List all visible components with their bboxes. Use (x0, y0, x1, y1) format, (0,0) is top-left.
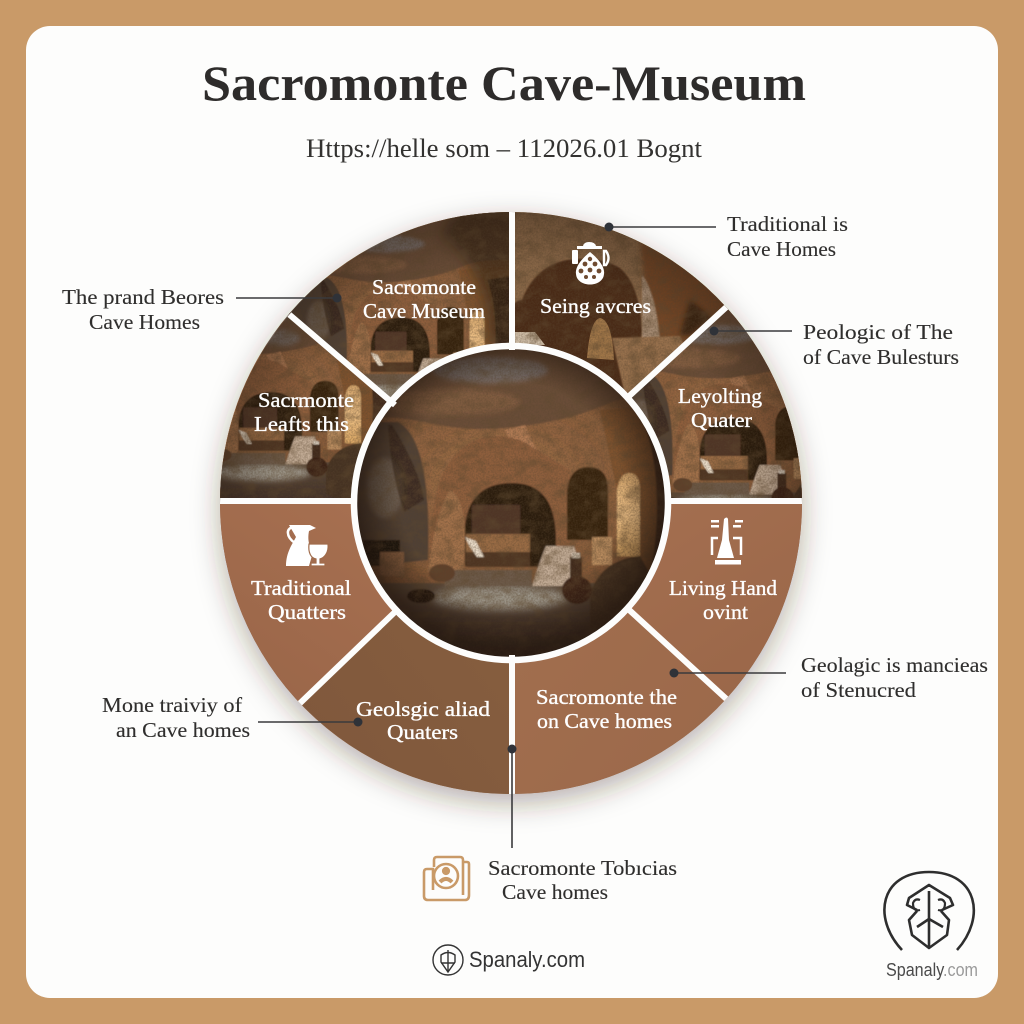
wedge: Leyolting Quater photo (632, 307, 802, 500)
logo wordmark: Spanaly.com (886, 960, 978, 980)
wheel shadow base (220, 212, 802, 794)
callout: Peologic of The of Cave Bulesturs (710, 320, 959, 369)
wedge: Sacrmonte Leafts this photo (220, 314, 386, 499)
callout: The prand Beores Cave Homes (62, 285, 342, 334)
callout: Traditional is Cave Homes (604, 212, 848, 261)
wedge: Sacromonte Cave Museum photo (289, 212, 509, 397)
circular wheel diagram (202, 204, 820, 820)
callout: Traditional is Cave Homes: Traditional is (727, 212, 848, 236)
logo emblem (884, 872, 974, 950)
callout: Sacromonte Tobicias Cave homes: Sacromonte Tobıcias (488, 856, 677, 880)
icon: hat and cluster (572, 242, 608, 284)
segment label: Sacromonte the on Cave homes: Sacromonte the (536, 685, 677, 709)
segment label: Sacromonte Cave Museum: Cave Museum (363, 299, 485, 323)
wedge: Living Hand ovint (511, 503, 802, 699)
callout: Traditional is Cave Homes: Cave Homes (727, 237, 836, 261)
segment label: Traditional Quatters: Quatters (268, 600, 346, 624)
footer logo icon (433, 945, 463, 975)
wedge: Seing avcres photo (515, 212, 726, 393)
central cave photo (357, 349, 665, 656)
icon: photo frames (424, 857, 469, 900)
icon: bell and handles (711, 518, 743, 564)
callout: Geolagic is mancieas of Stenucred: Geolagic is mancieas (801, 653, 988, 677)
callout: Sacromonte Tobicias Cave homes: Cave homes (502, 880, 608, 904)
callout: Sacromonte Tobicias Cave homes (488, 744, 677, 904)
icon: jug and cup (286, 525, 328, 566)
wedge: Sacromonte the on Cave homes (511, 503, 726, 794)
callout: Geolagic is mancieas of Stenucred: of Stenucred (801, 678, 917, 702)
segment label: Leyolting Quater: Leyolting (678, 384, 763, 408)
callout: The prand Beores Cave Homes: The prand Beores (62, 285, 224, 309)
segment label: Sacrmonte Leafts this: Sacrmonte (258, 388, 354, 412)
segment label: Geolsgic aliad Quaters: Quaters (387, 720, 458, 744)
callout: Peologic of The of Cave Bulesturs: Peologic of The (803, 320, 953, 344)
wedge: Geologic Quaters (300, 503, 511, 794)
segment label: Seing avcres: Seing avcres (540, 294, 651, 318)
segment label: Leyolting Quater: Quater (691, 408, 752, 432)
segment label: Sacromonte Cave Museum: Sacromonte (372, 275, 476, 299)
segment label: Geolsgic aliad Quaters: Geolsgic aliad (356, 697, 491, 721)
central ring (354, 346, 668, 660)
callout: Mone traiviy of an Cave homes: Mone traiviy of (102, 693, 242, 717)
brand logo (884, 872, 978, 980)
footer website text: Spanaly.com (469, 947, 585, 972)
rock texture overlay (215, 205, 810, 665)
callout: Mone traiviy of an Cave homes: an Cave homes (116, 718, 250, 742)
segment label: Living Hand ovint: Living Hand (669, 576, 778, 600)
segment label: Sacrmonte Leafts this: Leafts this (254, 412, 349, 436)
segment label: Sacromonte the on Cave homes: on Cave homes (537, 709, 672, 733)
callout: Peologic of The of Cave Bulesturs: of Cave Bulesturs (803, 345, 959, 369)
segment label: Traditional Quatters: Traditional (251, 576, 351, 600)
callout: The prand Beores Cave Homes: Cave Homes (89, 310, 200, 334)
callout: Geolagic is mancieas of Stenucred (670, 653, 988, 702)
title: Sacromonte Cave-Museum (202, 55, 806, 111)
white divider spokes (212, 205, 810, 800)
subtitle: Https://helle som – 112026.01 Bognt (306, 134, 703, 163)
wedge: Traditional Quatters (220, 503, 511, 703)
callout: Mone traiviy of an Cave homes (102, 693, 362, 742)
segment label: Living Hand ovint: ovint (703, 600, 748, 624)
